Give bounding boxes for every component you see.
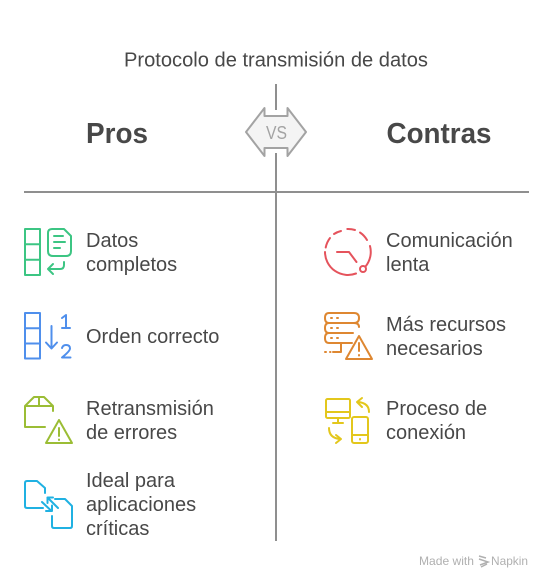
watermark: Napkin (491, 554, 528, 568)
text: proceso de conexion: Proceso de (386, 398, 487, 420)
text: retransmision de errores: Retransmisión (86, 398, 214, 420)
icon: table and document (25, 229, 71, 275)
vs badge (246, 108, 306, 156)
text: comunicacion lenta: Comunicación (386, 230, 513, 252)
text: mas recursos necesarios: Más recursos (386, 314, 506, 336)
icon: napkin logo (479, 556, 488, 567)
divider: horizontal line (24, 191, 529, 193)
panel: pros (25, 229, 219, 540)
text: datos completos: completos (86, 254, 177, 276)
text: comunicacion lenta: lenta (386, 254, 430, 276)
text: ideal para aplicaciones criticas: Ideal para (86, 470, 176, 492)
divider: vertical line (275, 84, 277, 541)
heading: pros: Pros (86, 118, 148, 150)
text: datos completos: Datos (86, 230, 138, 252)
text: ideal para aplicaciones criticas: aplicaciones (86, 494, 196, 516)
icon: servers with warning (325, 313, 372, 359)
panel: contras (325, 229, 513, 444)
title: Protocolo de transmisión de datos (124, 50, 428, 72)
text: retransmision de errores: de errores (86, 422, 177, 444)
vs badge: VS (266, 123, 287, 143)
icon: ordered table (25, 313, 70, 358)
text: proceso de conexion: conexión (386, 422, 466, 444)
text: orden correcto: Orden correcto (86, 326, 219, 348)
text: ideal para aplicaciones criticas: críticas (86, 518, 149, 540)
watermark: Made with (419, 554, 474, 568)
icon: package with warning (25, 397, 72, 443)
watermark (419, 554, 528, 568)
heading: contras: Contras (386, 118, 492, 150)
icon: dashed clock (325, 229, 371, 275)
icon: monitor and phone sync (326, 398, 369, 443)
icon: exchanging documents (25, 481, 72, 528)
text: mas recursos necesarios: necesarios (386, 338, 483, 360)
